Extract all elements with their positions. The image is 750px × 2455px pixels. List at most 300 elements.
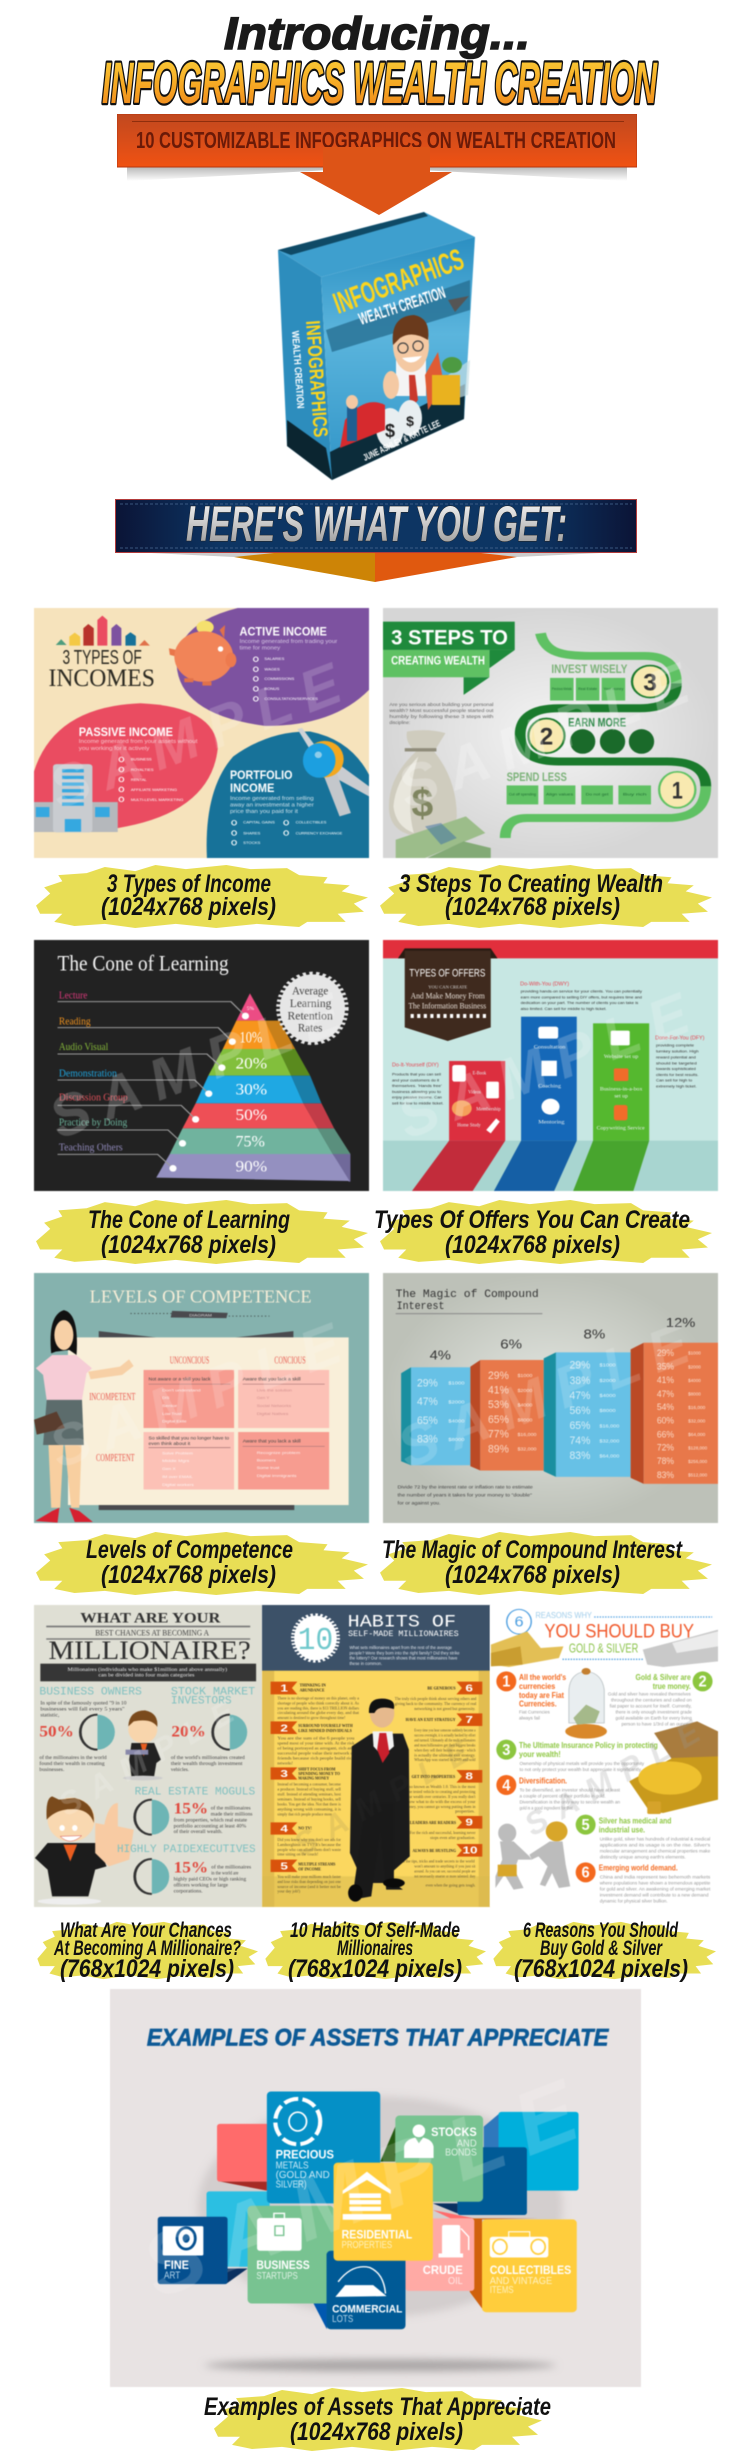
panel: magic of compound interest: [382, 1272, 719, 1524]
icon: keys: [297, 728, 369, 816]
panel: magic of compound interest: 35%: [657, 1362, 674, 1372]
caption: 6 reasons: (768x1024 pixels): [514, 1955, 688, 1983]
panel: the cone of learning: The Cone of Learning: [58, 951, 229, 976]
donuts: [80, 1715, 247, 1894]
panel: 6 reasons gold & silver: gold is a good ingredient for that.: [519, 1806, 574, 1811]
panel: levels of competence: Live the solution: [257, 1388, 292, 1393]
panel: 10 habits: 4: [280, 1823, 288, 1835]
purple: [177, 608, 369, 726]
side text: [392, 982, 704, 1106]
panel: types of offers: E-Book: [473, 1070, 487, 1076]
panel: levels of competence: Digital Natives: [257, 1412, 289, 1417]
reasons: true money.: [653, 1682, 691, 1692]
panel: 10 habits: your day job!): [277, 1890, 300, 1894]
panel: magic of compound interest: $1000: [517, 1374, 533, 1379]
panel: magic of compound interest: $4000: [448, 1419, 465, 1424]
panel: 10 habits: you are reading this, there is $13 TRILLION dollars: [277, 1707, 359, 1711]
panel: chances of becoming a millionaire: INVESTORS: [171, 1694, 232, 1707]
panel: 6 reasons gold & silver: Fiat Currencies: [519, 1710, 550, 1715]
panel: 3 types of incomes: PORTFOLIO: [230, 769, 292, 782]
panel: magic of compound interest: $8000: [599, 1409, 616, 1414]
panel: 3 types of incomes: Income generated from trading your: [240, 639, 338, 645]
panel: 10 habits: these in common.: [349, 1662, 382, 1667]
panel: levels of competence: Recognize problem: [257, 1451, 300, 1456]
panel: magic of compound interest: $4000: [688, 1379, 701, 1384]
panel: magic of compound interest: 60%: [657, 1416, 674, 1426]
panel: magic of compound interest: 12%: [666, 1316, 695, 1330]
panel: magic of compound interest: 54%: [657, 1403, 674, 1413]
panel: magic of compound interest: the number of years it takes for your money to "double": [397, 1493, 532, 1498]
panel: 3 types of incomes: time for money: [240, 645, 281, 651]
product box: WEALTH CREATION: [289, 330, 305, 409]
panel: 10 habits: Instead of becoming a consumer, become: [277, 1783, 341, 1787]
panel: levels of competence: Some trust: [257, 1466, 280, 1471]
panel: 3 types of incomes: MULTI-LEVEL MARKETING: [131, 798, 184, 803]
labels: Reading: [59, 1015, 91, 1027]
panel: magic of compound interest: 29%: [488, 1369, 509, 1381]
side text: enjoy passive income. Can: [392, 1095, 442, 1100]
panel: 10 habits: Did you know why you don't see ads for: [277, 1838, 341, 1843]
panel: magic of compound interest: 77%: [488, 1428, 509, 1440]
columns: [401, 1343, 718, 1484]
panel: chances of becoming a millionaire: of the millionaires in the world: [39, 1755, 107, 1761]
panel: chances of becoming a millionaire: In spite of the famously quoted "9 in 10: [40, 1700, 127, 1706]
panel: magic of compound interest: $4000: [517, 1403, 533, 1408]
panel: chances of becoming a millionaire: BUSINESS OWNERS: [39, 1685, 142, 1698]
side text: Can sell for high to: [656, 1078, 693, 1083]
reasons: Silver has medical and: [599, 1817, 671, 1826]
panel: levels of competence: DIAGRAM: [189, 1313, 212, 1317]
caption: 10 habits: Millionaires: [337, 1937, 413, 1960]
block: stocks and bonds: STOCKS: [431, 2126, 477, 2139]
labels: [59, 989, 128, 1153]
panel: levels of competence: even think about it: [149, 1442, 191, 1447]
panel: types of offers: Home Study: [457, 1122, 481, 1128]
panel: chances of becoming a millionaire: vehicles.: [171, 1768, 190, 1773]
woman: [34, 1310, 134, 1523]
panel: 10 habits: friends because rich people build rich: [277, 1757, 355, 1761]
panel: magic of compound interest: The Magic of Compound: [396, 1289, 539, 1301]
panel: 3 steps to creating wealth: discipline:: [389, 721, 410, 726]
panel: chances of becoming a millionaire: [34, 1604, 262, 1908]
badge: [294, 1616, 337, 1660]
panel: 6 reasons gold & silver: dynamic for physical silver bullion.: [600, 1899, 668, 1904]
block: commercial lots: [327, 2251, 406, 2329]
panel: levels of competence: COMPETENT: [96, 1452, 135, 1464]
block: collectibles: COLLECTIBLES: [490, 2263, 571, 2277]
panel: 10 habits: 7: [465, 1714, 473, 1726]
panel: 3 types of incomes: INCOMES: [48, 663, 155, 692]
panel: chances of becoming a millionaire: highly paid CEOs or high ranking: [174, 1877, 246, 1882]
panel: types of offers: SAMPLE: [389, 976, 711, 1151]
block: precious metals: PRECIOUS: [276, 2148, 334, 2162]
panel: magic of compound interest: 53%: [488, 1398, 509, 1411]
reasons: currencies: [519, 1682, 556, 1692]
panel: magic of compound interest: $512,000: [688, 1473, 707, 1478]
reasons: industrial use.: [599, 1826, 645, 1835]
panel: 10 habits: LEADERS ARE READERS: [410, 1821, 456, 1826]
panel: magic of compound interest: 38%: [570, 1374, 590, 1386]
side text: should be targeted: [656, 1061, 697, 1065]
panel: 3 steps to creating wealth: 3: [643, 670, 657, 696]
panel: 3 types of incomes: Income generated from selling: [230, 796, 314, 802]
labels: Lecture: [59, 989, 87, 1001]
panel: 10 habits: SAMPLE: [287, 1727, 487, 1863]
panel: levels of competence: Digital workers: [162, 1482, 194, 1487]
icon: silver figures shaking hands: [495, 1821, 570, 1890]
panel: types of offers: Consultation: [534, 1044, 566, 1050]
icon: treasure chest: [629, 1721, 718, 1814]
panel: 3 types of incomes: CURRENCY EXCHANGE: [296, 831, 342, 836]
panel: 3 steps to creating wealth: Real Estate: [578, 687, 598, 691]
panel: 10 habits: seminars. Instead of buying books, sell: [277, 1798, 341, 1802]
panel: chances of becoming a millionaire: Millionaires (individuals who make $1million and above annually): [68, 1667, 227, 1673]
ribbon: [398, 948, 498, 1041]
panel: types of offers: Copywriting Service: [597, 1125, 645, 1131]
panel: 10 habits: LIKE MINDED INDIVIDUALS: [298, 1729, 352, 1734]
panel: 6 reasons gold & silver: person to have 1/3rd of an ounce: [621, 1722, 689, 1727]
panel: 10 habits: 1: [280, 1682, 288, 1694]
caption: levels of competence: (1024x768 pixels): [101, 1561, 276, 1589]
panel: 10 habits: ALWAYS BE HUSTLING: [412, 1849, 456, 1854]
block: residential properties: RESIDENTIAL: [342, 2228, 413, 2241]
panel: 3 steps to creating wealth: 2: [540, 724, 553, 750]
reasons: 2: [699, 1672, 707, 1690]
panel: 6 reasons gold & silver: SAMPLE: [518, 1707, 718, 1843]
panel: 3 types of incomes: away an investmentat a higher: [230, 803, 314, 808]
icon: building: [34, 764, 118, 832]
panel: 3 types of incomes: WAGES: [264, 667, 280, 672]
panel: the cone of learning: 10%: [240, 1029, 262, 1046]
header ribbon: 3 STEPS TO: [391, 626, 508, 649]
panel: magic of compound interest: 41%: [488, 1383, 509, 1396]
caption: the cone of learning: The Cone of Learning: [88, 1206, 290, 1234]
side text: dedication on your part. The number of clients you can take is: [521, 1001, 639, 1005]
panel: magic of compound interest: 47%: [657, 1389, 674, 1399]
panel: the cone of learning: SAMPLE: [41, 976, 363, 1151]
panel: magic of compound interest: 56%: [570, 1404, 590, 1416]
block back: [207, 2112, 579, 2329]
panel: magic of compound interest: 74%: [570, 1434, 590, 1446]
panel: 6 reasons gold & silver: always fail: [519, 1716, 540, 1721]
starburst: Average: [292, 984, 328, 998]
panel: 10 habits: [261, 1604, 490, 1908]
panel: chances of becoming a millionaire: businesses.: [39, 1768, 65, 1773]
panel: 10 habits: people who can afford them don't waste: [277, 1848, 341, 1853]
reasons: Currencies.: [519, 1700, 557, 1709]
panel: 3 types of incomes: SALARIES: [264, 657, 284, 662]
panel: 10 habits: 8: [465, 1770, 473, 1782]
block: business startups: STARTUPS: [256, 2271, 298, 2282]
panel: magic of compound interest: $1000: [688, 1351, 701, 1356]
block: stocks and bonds: [395, 2116, 483, 2202]
panel: magic of compound interest: 83%: [417, 1433, 438, 1445]
cards: [144, 1370, 329, 1489]
panel: magic of compound interest: $128,000: [688, 1446, 707, 1451]
panel: 10 habits: THINKING IN: [300, 1684, 326, 1688]
panel: levels of competence: CONCIOUS: [274, 1354, 306, 1366]
caption: levels of competence: Levels of Competence: [86, 1536, 293, 1564]
panel: levels of competence: [33, 1272, 370, 1524]
panel: 10 habits: You will make your millions much faster: [277, 1875, 341, 1880]
panel: 3 types of incomes: AFFILIATE MARKETING: [131, 787, 177, 792]
panel: magic of compound interest: $8000: [448, 1438, 465, 1443]
panel: magic of compound interest: for or against you.: [397, 1501, 441, 1506]
panel: 10 habits: SHIFT FOCUS FROM: [298, 1768, 336, 1772]
panel: levels of competence: Not aware or a skill you lack: [149, 1377, 211, 1382]
panel: 10 habits: stuff. Instead of attending seminars, host: [277, 1793, 341, 1797]
panel: magic of compound interest: $16,000: [517, 1433, 537, 1438]
panel: levels of competence: Middle Mgrs: [162, 1459, 190, 1464]
panel: 6 reasons gold & silver: Diversification is the only way to secure wealth an: [519, 1800, 620, 1805]
starburst: [280, 974, 345, 1042]
panel: 10 habits: MULTIPLE STREAMS: [298, 1863, 336, 1867]
panel: magic of compound interest: 89%: [488, 1443, 509, 1455]
side text: Done-For-You (DFY): [655, 1036, 704, 1041]
panel: levels of competence: Gen Y: [257, 1396, 270, 1401]
panel: 10 habits: amount is destined to grow throughout time!: [277, 1716, 346, 1721]
panel: 10 habits: HABITS OF: [348, 1613, 456, 1633]
panel: levels of competence: Social Networks: [257, 1404, 292, 1409]
panel: 3 types of incomes: [33, 607, 370, 859]
panel: magic of compound interest: 65%: [570, 1419, 590, 1432]
panel: magic of compound interest: $64,000: [599, 1454, 619, 1459]
panel: 10 habits: 3: [280, 1768, 288, 1780]
panel: 3 steps to creating wealth: Are you serious about building your personal: [389, 703, 493, 708]
side text: towards sophisticated: [656, 1067, 696, 1071]
panel: 10 habits: simply that rich people produce more: [277, 1813, 332, 1817]
board: [68, 1337, 349, 1510]
panel: magic of compound interest: 83%: [570, 1449, 590, 1461]
panel: 6 reasons gold & silver: fiat paper to account for itself. Currently,: [610, 1704, 692, 1709]
panel: 3 types of incomes: price than you paid for it: [230, 809, 298, 815]
panel: 10 habits: NO TV!: [298, 1827, 312, 1831]
panel: 10 habits: successful people value their network of: [277, 1752, 355, 1756]
panel: 3 types of incomes: COMMISSIONS: [264, 677, 294, 682]
block: collectibles: ITEMS: [490, 2285, 514, 2296]
labels: Teaching Others: [59, 1141, 123, 1153]
panel: 3 steps to creating wealth: humbly by following these 3 steps with: [389, 715, 494, 720]
watermark: SAMPLE: [41, 647, 363, 821]
panel: magic of compound interest: $8000: [688, 1392, 701, 1397]
panel: magic of compound interest: SAMPLE: [389, 1307, 711, 1481]
panel: 10 habits: BE GENEROUS: [427, 1687, 456, 1691]
reasons: [496, 1671, 713, 1882]
block: fine art: ART: [164, 2271, 181, 2281]
ribbon: The Information Business: [408, 1002, 486, 1011]
icon: bar arrows: [56, 616, 150, 646]
panel: magic of compound interest: 29%: [657, 1348, 674, 1359]
panel: 3 types of incomes: CAPITAL GAINS: [243, 820, 275, 825]
block: commercial lots: COMMERCIAL: [332, 2304, 402, 2315]
panel: 6 reasons gold & silver: To be diversified, an investor should have at least: [519, 1788, 620, 1793]
block: fine art: FINE: [164, 2258, 189, 2272]
pyramid: [156, 993, 350, 1182]
panel: magic of compound interest: $4000: [599, 1393, 616, 1399]
panel: magic of compound interest: $256,000: [688, 1460, 707, 1465]
panel: magic of compound interest: 4%: [430, 1348, 451, 1363]
panel: chances of becoming a millionaire: corporations.: [174, 1889, 203, 1894]
panel: 10 habits: and lose risks than depending on just one: [277, 1880, 341, 1885]
panel: 3 types of incomes: RENTAL: [131, 777, 147, 782]
panel: 3 types of incomes: Income generated from your assets without: [79, 739, 198, 745]
panel: 3 steps to creating wealth: Buy rich: [623, 792, 646, 797]
side text: providing complete: [656, 1043, 695, 1047]
winding path: [505, 633, 706, 838]
panel: examples of assets that appreciate: SAMPLE: [129, 2056, 603, 2317]
panel: chances of becoming a millionaire: SAMPLE: [52, 1687, 252, 1823]
panel: 3 types of incomes: ROYALTIES: [131, 768, 154, 773]
columns: [412, 1017, 649, 1191]
panel: magic of compound interest: 47%: [417, 1395, 438, 1408]
panel: levels of competence: Gen X: [162, 1467, 177, 1472]
banner: orange subtitle with arrow: [117, 114, 637, 215]
badge: 10: [298, 1624, 333, 1659]
caption: magic of compound interest: [380, 1532, 712, 1595]
panel: 3 steps to creating wealth: INVEST WISELY: [551, 663, 628, 677]
reasons: 6: [582, 1863, 590, 1881]
panel: 3 steps to creating wealth: 1: [672, 777, 683, 804]
product box: [277, 211, 476, 481]
panel: 10 habits: a producer. Instead of buying stuff, sell: [277, 1788, 341, 1792]
caption: types of offers: [374, 1200, 712, 1264]
panel: chances of becoming a millionaire: 50%: [39, 1723, 74, 1741]
panel: the cone of learning: 50%: [235, 1107, 267, 1123]
caption: 3 steps to creating wealth: (1024x768 pixels): [445, 893, 620, 921]
labels: Audio Visual: [59, 1041, 109, 1053]
product box: $: [385, 421, 395, 441]
panel: 6 reasons gold & silver: REASONS WHY: [535, 1611, 592, 1621]
caption: 3 types of income: [36, 865, 368, 928]
panel: 3 types of incomes: CONSULTATION/SERVICES: [264, 697, 318, 702]
panel: 10 habits: You are the sum of the 6 people you: [277, 1737, 355, 1741]
panel: 3 types of incomes: COLLECTIBLES: [296, 820, 326, 825]
caption: 3 types of income: (1024x768 pixels): [101, 893, 276, 921]
panel: the cone of learning: 5%: [247, 1006, 255, 1012]
panel: chances of becoming a millionaire: in the world are: [211, 1871, 239, 1876]
panel: magic of compound interest: $8000: [517, 1418, 533, 1423]
side text: turnkey solution. High: [656, 1049, 699, 1053]
caption: types of offers: (1024x768 pixels): [445, 1231, 620, 1259]
starburst: Learning: [290, 997, 331, 1010]
caption: the cone of learning: [36, 1200, 368, 1264]
panel: the cone of learning: 30%: [235, 1081, 267, 1098]
panel: chances of becoming a millionaire: of the millionaires: [211, 1864, 251, 1870]
panel: magic of compound interest: Interest: [397, 1301, 445, 1313]
caption: examples of assets: (1024x768 pixels): [290, 2418, 463, 2446]
panel: 6 reasons gold & silver: to not only protect your wealth but appreciate it significantly.: [519, 1768, 642, 1773]
panel: types of offers: set up: [614, 1093, 628, 1099]
block: precious metals: [267, 2092, 380, 2203]
panel: 10 habits: spend most of your time with. At the risk: [277, 1742, 355, 1746]
businessman: [348, 1698, 410, 1902]
panel: chances of becoming a millionaire: WHAT ARE YOUR: [80, 1609, 221, 1626]
panel: magic of compound interest: $2000: [599, 1379, 616, 1384]
panel: chances of becoming a millionaire: of their overall wealth.: [174, 1829, 223, 1835]
block: commercial lots: LOTS: [332, 2314, 354, 2325]
panel: 3 steps to creating wealth: wealth? Most successful people started out: [389, 709, 494, 714]
panel: 10 habits: 5: [280, 1860, 288, 1872]
panel: chances of becoming a millionaire: made their millions: [211, 1812, 252, 1817]
block: business startups: [248, 2206, 334, 2304]
caption: levels of competence: [36, 1532, 368, 1595]
panel: types of offers: Website set up: [604, 1054, 638, 1060]
side text: earn more compared to selling DIY offers, but requires time and: [521, 995, 643, 999]
header ribbon: [383, 622, 515, 695]
reasons: 3: [502, 1741, 510, 1758]
panel: types of offers: Business-in-a-box: [600, 1086, 643, 1092]
panel: levels of competence: Aware that you lack a skill: [243, 1377, 301, 1382]
panel: 10 habits: OF INCOME: [298, 1868, 321, 1872]
panel: chances of becoming a millionaire: from properties, which real estate: [174, 1817, 248, 1823]
side text: sell for low to middle ticket.: [392, 1101, 444, 1106]
panel: examples of assets that appreciate: [110, 1988, 642, 2388]
block: collectibles: AND VINTAGE: [490, 2276, 553, 2287]
panel: levels of competence: DIS: [162, 1396, 169, 1401]
block: stocks and bonds: BONDS: [445, 2148, 477, 2159]
caption: 3 steps to creating wealth: [380, 865, 712, 928]
ribbon: And Make Money From: [411, 992, 485, 1001]
panel: chances of becoming a millionaire: businesses will fall every 5 years": [40, 1706, 125, 1712]
panel: 6 reasons gold & silver: throughout the centuries and called on: [611, 1698, 692, 1703]
caption: 3 types of income: 3 Types of Income: [107, 870, 271, 898]
panel: magic of compound interest: $64,000: [688, 1433, 705, 1438]
panel: 10 habits: HAVE AN EXIT STRATEGY: [406, 1718, 456, 1723]
panel: magic of compound interest: 65%: [488, 1413, 509, 1426]
panel: 3 steps to creating wealth: Do not get: [586, 792, 610, 797]
panel: 3 steps to creating wealth: Your money: [603, 687, 623, 691]
panel: levels of competence: UNCONCIOUS: [170, 1354, 209, 1366]
side text: Products that you can sell: [392, 1072, 441, 1076]
block: precious metals: SILVER): [276, 2180, 307, 2190]
panel: 10 habits: books. You get the idea. Not that there is: [277, 1803, 341, 1807]
panel: levels of competence: Digital Exile: [162, 1419, 187, 1424]
banner: here's what you get: [115, 499, 637, 582]
reasons: 5: [582, 1816, 590, 1833]
panel: 10 habits: SPENDING MONEY TO: [298, 1772, 340, 1777]
caption: 6 reasons: Buy Gold & Silver: [540, 1937, 663, 1960]
panel: magic of compound interest: $2000: [688, 1365, 701, 1370]
icon: small businessman: [123, 1710, 163, 1780]
panel: magic of compound interest: 6%: [500, 1337, 522, 1352]
panel: types of offers: Mentoring: [538, 1119, 565, 1125]
panel: 10 habits: source of income (and it better not be: [277, 1885, 341, 1890]
side text: extremely high ticket.: [656, 1084, 697, 1089]
side text: clients for best results.: [656, 1073, 699, 1077]
block: crude oil: OIL: [448, 2276, 463, 2287]
starburst: Retention: [288, 1009, 333, 1023]
panel: 3 types of incomes: you working for it actively: [79, 746, 150, 751]
caption: the cone of learning: (1024x768 pixels): [101, 1231, 276, 1259]
block: residential properties: [334, 2163, 433, 2261]
caption: chances of becoming a millionaire: (768x1024 pixels): [60, 1955, 234, 1983]
panel: levels of competence: SAMPLE: [41, 1307, 363, 1481]
panel: 3 steps to creating wealth: Cut off spending: [509, 792, 536, 797]
panel: magic of compound interest: 8%: [584, 1328, 605, 1342]
caption: 10 habits: (768x1024 pixels): [288, 1955, 462, 1983]
ribbon: TYPES OF OFFERS: [409, 967, 485, 979]
panel: types of offers: Videos: [468, 1089, 481, 1095]
caption: 3 steps to creating wealth: 3 Steps To Creating Wealth: [399, 870, 663, 898]
panel: 3 types of incomes: INCOME: [230, 782, 274, 795]
side text: and your customers do it: [392, 1078, 440, 1082]
panel: 3 types of incomes: STOCKS: [243, 841, 260, 846]
panel: levels of competence: Low Trust: [162, 1412, 182, 1417]
panel: magic of compound interest: 47%: [570, 1389, 590, 1401]
panel: 6 reasons gold & silver: a couple of percent of their portfolio in gold.: [519, 1794, 606, 1799]
panel: levels of competence: Solve Problem: [162, 1451, 193, 1456]
block: business startups: BUSINESS: [256, 2258, 310, 2272]
